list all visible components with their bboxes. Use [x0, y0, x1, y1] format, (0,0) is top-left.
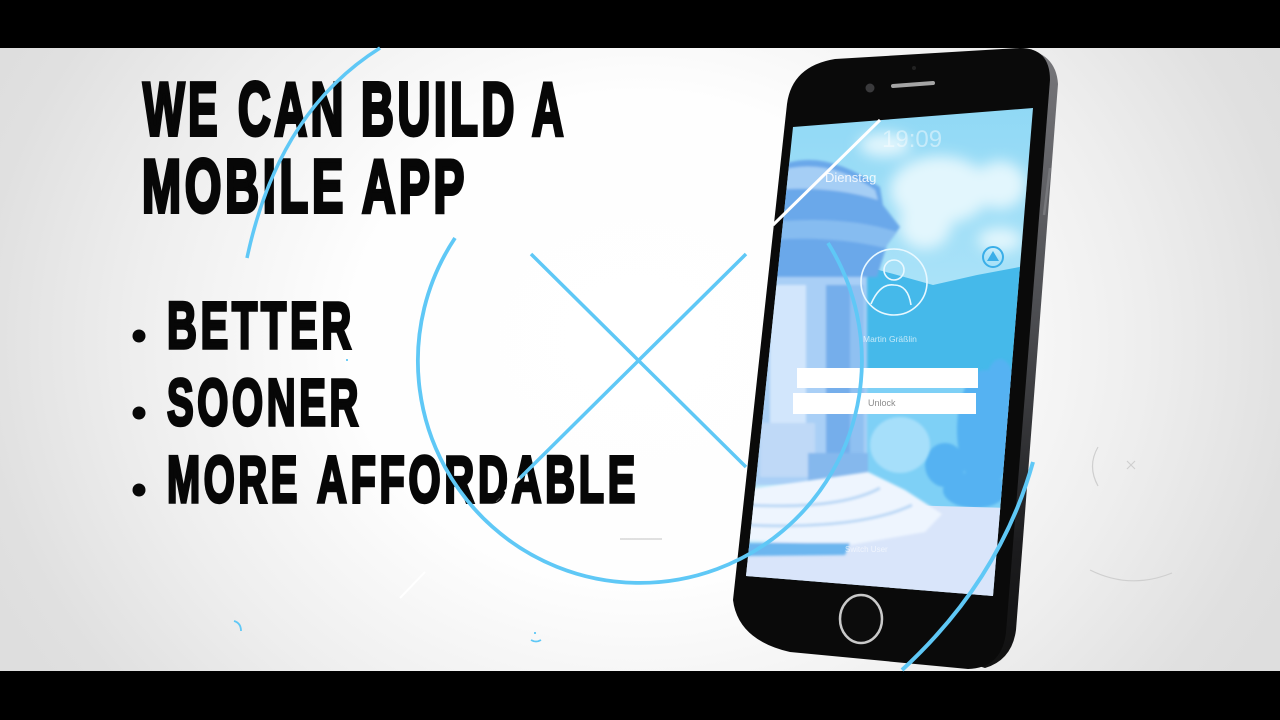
speaker: [893, 83, 933, 86]
date: Dienstag: [825, 170, 876, 185]
volume button: [1044, 168, 1050, 215]
blue line graphics: [247, 48, 1033, 670]
ground: [746, 506, 1000, 596]
screen: [740, 100, 1040, 610]
heading: CAN: [238, 67, 347, 151]
bottom letterbox bar: [0, 671, 1280, 720]
bullet: better: BETTER: [167, 288, 355, 362]
heading: [142, 67, 567, 228]
top letterbox bar: [0, 0, 1280, 48]
faint decorative marks: [620, 447, 1172, 581]
front camera: [866, 84, 874, 92]
bullet: better: [132, 288, 355, 362]
x line: ascending: [520, 254, 746, 478]
arc: upper left: [247, 48, 380, 258]
heading: APP: [362, 144, 468, 228]
temple steps: [740, 472, 942, 556]
heading: BUILD: [361, 67, 518, 151]
bullet: more affordable: MORE: [167, 442, 301, 516]
light trees: [870, 417, 930, 473]
x line: descending: [531, 254, 746, 467]
user name: Martin Gräßlin: [863, 334, 917, 344]
sky: [740, 100, 1040, 610]
small blue specks: [234, 359, 541, 642]
lake and far shore: [866, 385, 1010, 515]
trees: [925, 359, 1014, 508]
temple roof: [770, 160, 900, 277]
phone: [733, 48, 1058, 669]
up arrow icon: [983, 247, 1003, 267]
clouds: [859, 133, 1026, 252]
bullet: sooner: SOONER: [167, 365, 362, 439]
heading: A: [532, 67, 567, 151]
phone body: [733, 48, 1050, 669]
switch user label: Switch User: [845, 545, 888, 554]
clock: 19:09: [882, 126, 942, 153]
user avatar: [861, 249, 927, 315]
bullet: more affordable: AFFORDABLE: [317, 442, 639, 516]
unlock button: Unlock: [868, 398, 896, 408]
sensor dot: [912, 66, 916, 70]
phone side edge: [960, 48, 1058, 668]
bullet list: [132, 288, 639, 516]
mountains: [865, 266, 1020, 419]
heading: WE: [143, 67, 221, 151]
temple base: [760, 423, 815, 477]
arc: large circle: [418, 238, 862, 583]
temple columns: [755, 160, 900, 485]
bullet: more affordable: [132, 442, 639, 516]
bullet: sooner: [132, 365, 362, 439]
password field: [797, 368, 978, 388]
arc: lower right: [902, 462, 1033, 670]
heading: MOBILE: [142, 144, 347, 228]
unlock button: [793, 393, 976, 414]
home button: [840, 595, 882, 643]
white accent lines: [400, 120, 880, 598]
